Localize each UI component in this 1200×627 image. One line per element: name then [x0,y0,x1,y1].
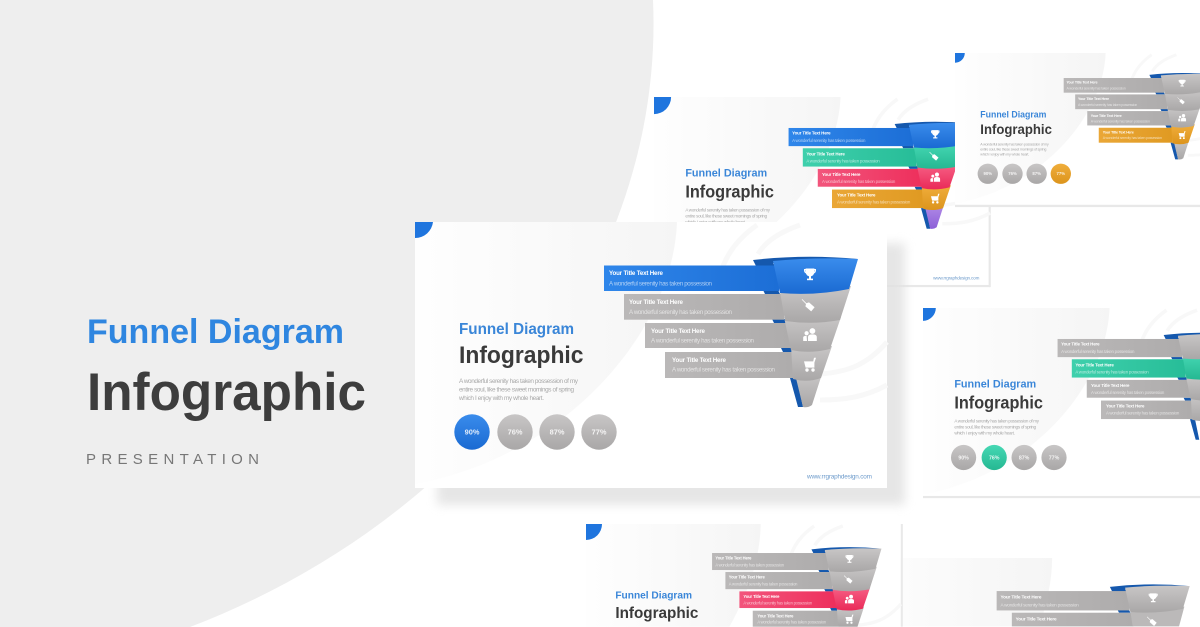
panel: main slide [415,222,887,488]
slide: middle right, teal highlight: Your Title Text Here [1091,383,1130,388]
chart: funnel diagram: Your Title Text Here [629,299,684,306]
slide: middle right, teal highlight: Funnel Diagram [954,379,1036,391]
chart: funnel diagram: A wonderful serenity has taken possession [651,338,755,344]
main slide shadow [437,243,905,505]
slide: bottom centre, pink highlight: Funnel Diagram [615,591,692,602]
slide: top centre, all colours: Funnel Diagram [685,168,767,180]
slide: top centre, all colours: entire soul, like these sweet mornings of spring [685,214,768,219]
background: grey curved panel [0,0,654,627]
chart: funnel diagram [604,257,858,407]
subtitle: presentation: PRESENTATION [86,451,259,468]
slide: top right, orange highlight: A wonderful serenity has taken possession [1067,87,1126,91]
slide: middle right, teal highlight: A wonderful serenity has taken possession of my [954,419,1040,424]
slide: top centre, all colours: Your Title Text Here [792,131,831,136]
heading: Funnel Diagram: Funnel Diagram [87,313,344,351]
slide: middle right, teal highlight: 76% [989,455,1000,461]
slide: top right, orange highlight: Your Title Text Here [1067,80,1098,84]
text block: description: entire soul, like these sweet mornings of spring [459,386,574,394]
slide: top centre, all colours: Infographic [685,182,774,201]
chart: funnel diagram: Your Title Text Here [609,270,664,277]
slide: middle right, teal highlight: 77% [1049,455,1060,461]
text block: description: which I enjoy with my whole heart. [458,395,544,402]
slide: bottom centre, pink highlight: A wonderful serenity has taken possession [757,620,827,625]
slide: middle right, teal highlight: A wonderful serenity has taken possession [1091,390,1165,395]
slide: bottom right, partly hidden: Your Title Text Here [1016,616,1057,621]
slide: top right, orange highlight: 90% [984,171,992,176]
slide: bottom right, partly hidden: Your Title Text Here [1000,594,1042,599]
slide: top right, orange highlight: A wonderful serenity has taken possession of my [980,143,1049,147]
slide: top right, orange highlight: A wonderful serenity has taken possession [1078,103,1137,107]
text block: description: A wonderful serenity has taken possession of my [459,378,579,385]
percentage circles: 90% [465,428,480,436]
slide: middle right, teal highlight: entire soul, like these sweet mornings of spring [954,425,1037,430]
slide: top right, orange highlight: Your Title Text Here [1091,114,1122,118]
chart: funnel diagram: Your Title Text Here [672,357,727,364]
percentage circles: 76% [508,428,523,436]
slide: middle right, teal highlight: Your Title Text Here [1106,404,1145,409]
slide: top right, orange highlight: Your Title Text Here [1078,97,1109,101]
slide: top right, orange highlight: 87% [1032,171,1041,176]
slide: bottom centre, pink highlight: Your Title Text Here [757,613,794,618]
slide: middle right, teal highlight: Your Title Text Here [1075,362,1114,367]
slide: middle right, teal highlight: Infographic [954,393,1043,412]
slide: top centre, all colours: A wonderful serenity has taken possession [806,159,880,164]
slide: top right, orange highlight: 76% [1008,171,1017,176]
slide: top right, orange highlight: Funnel Diagram [980,109,1046,119]
slide: middle right, teal highlight: 90% [958,455,969,461]
slide: middle right, teal highlight: which I enjoy with my whole heart. [954,431,1015,436]
slide: bottom centre, pink highlight: A wonderful serenity has taken possession [743,600,813,605]
slide: top right, orange highlight: Infographic [980,122,1052,137]
slide: top right, orange highlight: entire soul, like these sweet mornings of spring [980,147,1046,151]
heading: slide subtitle: Infographic [459,342,584,369]
text block: description [458,378,579,402]
slide: middle right, teal highlight: A wonderful serenity has taken possession [1061,349,1135,354]
chart: funnel diagram: A wonderful serenity has taken possession [672,366,776,374]
slide: top right, orange highlight: which I enjoy with my whole heart. [980,152,1029,156]
chart: funnel diagram: A wonderful serenity has taken possession [629,309,733,316]
slide: top centre, all colours: which I enjoy with my whole heart. [685,220,746,225]
slide: bottom right, partly hidden [853,558,1200,626]
slide: top centre, all colours: A wonderful serenity has taken possession [822,179,896,184]
slide: top right, orange highlight: A wonderful serenity has taken possession [1103,136,1162,140]
heading: Infographic: Infographic [87,363,366,422]
slide: middle right, teal highlight: 87% [1019,455,1030,461]
slide: bottom centre, pink highlight: Your Title Text Here [715,555,752,560]
slide: top right, orange highlight: 77% [1057,171,1065,176]
slide: top centre, all colours: Your Title Text Here [837,193,876,198]
slide: middle right, teal highlight: A wonderful serenity has taken possession [1075,370,1149,375]
slide: top centre, all colours: A wonderful serenity has taken possession of my [685,208,771,213]
slide: bottom centre, pink highlight [586,524,903,627]
percentage circles [454,414,617,450]
percentage circles: 87% [550,428,565,436]
slide: bottom centre, pink highlight: Your Title Text Here [729,575,765,580]
slide: top centre, all colours: www.rrgraphdesign.com [933,276,980,281]
slide: top right, orange highlight [955,53,1200,207]
slide: top centre, all colours: Your Title Text Here [822,172,861,177]
percentage circles: 77% [592,428,607,436]
slide: top centre, all colours: A wonderful serenity has taken possession [837,199,911,204]
slide: top right, orange highlight: A wonderful serenity has taken possession [1091,119,1150,123]
slide: bottom centre, pink highlight: Your Title Text Here [743,594,780,599]
slide: top centre, all colours: Your Title Text Here [806,151,845,156]
chart: funnel diagram: A wonderful serenity has taken possession [609,280,713,288]
icon: blue corner [415,222,433,238]
slide: bottom centre, pink highlight: A wonderful serenity has taken possession [715,562,785,567]
slide: bottom right, partly hidden: A wonderful serenity has taken possession [1000,602,1079,607]
slide: middle right, teal highlight: Your Title Text Here [1061,342,1100,347]
heading: slide title: Funnel Diagram [459,321,574,338]
slide: bottom centre, pink highlight: A wonderful serenity has taken possession [729,581,798,586]
text: website: www.rrgraphdesign.com [806,474,872,480]
slide: top centre, all colours [654,97,991,287]
slide: top right, orange highlight: Your Title Text Here [1103,130,1134,135]
slide: bottom centre, pink highlight: Infographic [615,605,698,622]
slide: top centre, all colours: A wonderful serenity has taken possession [792,138,866,143]
chart: funnel diagram: Your Title Text Here [651,328,706,335]
slide: middle right, teal highlight: A wonderful serenity has taken possession [1106,410,1180,415]
slide: middle right, teal highlight [923,308,1200,498]
